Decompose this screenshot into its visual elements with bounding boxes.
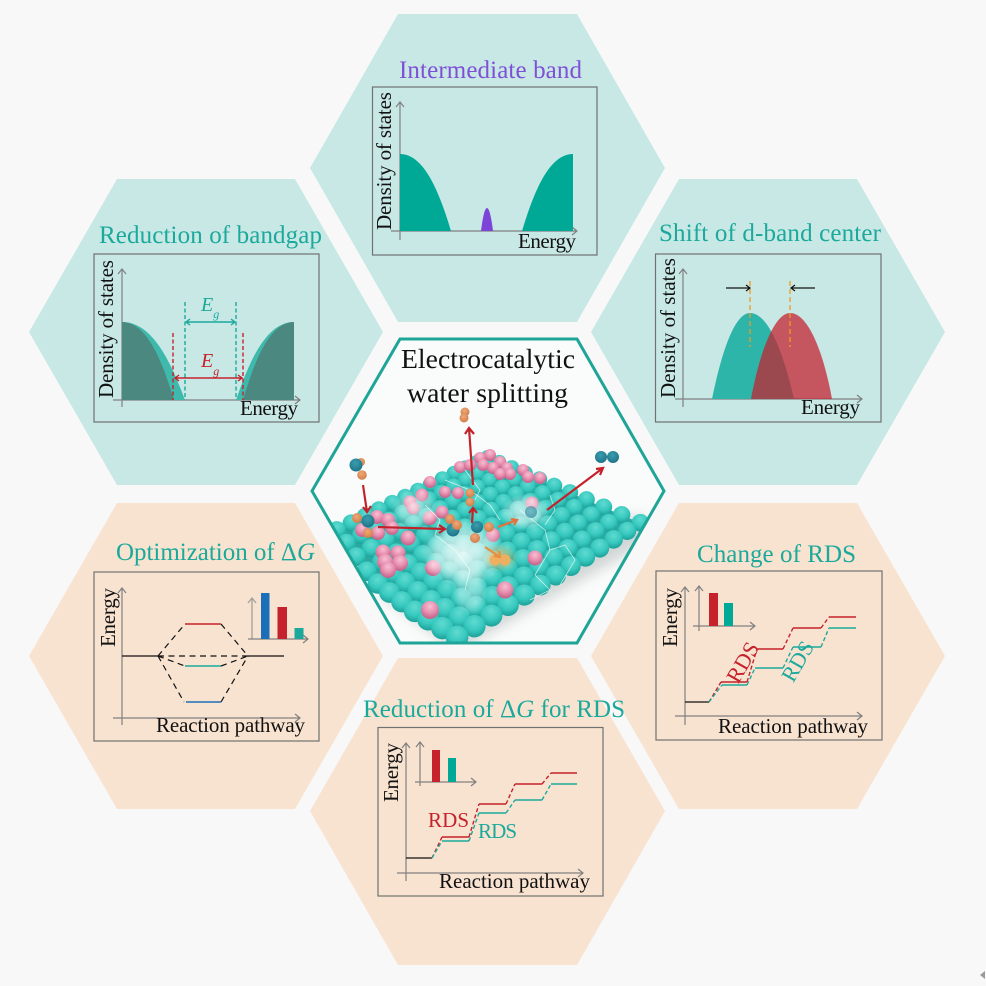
lightning lines [425, 470, 575, 600]
chart: energy levels: Energy [96, 588, 120, 647]
heading: change of RDS: Change of RDS [697, 541, 856, 568]
chart: bandgap comparison [94, 254, 319, 422]
corner mark [980, 971, 985, 979]
chart: change of rate determining step: Energy [658, 588, 682, 647]
chart: change of rate determining step: RDS [776, 636, 819, 686]
panel: reduction of delta G for RDS [310, 658, 665, 965]
chart: d-band shift: Density of states [656, 258, 680, 398]
hexagon outline [312, 339, 664, 643]
reaction arrows [363, 428, 603, 557]
panel: central electrocatalytic water splitting [312, 339, 664, 653]
chart: d-band shift [656, 254, 881, 422]
chart: bandgap comparison: Energy [240, 396, 298, 420]
water and gas molecules [350, 408, 619, 566]
catalyst illustration [332, 449, 648, 642]
chart: density of states with intermediate band: Density of states [372, 92, 396, 230]
chart: reduced barrier of rate determining step: RDS [478, 819, 517, 843]
chart: energy levels: Reaction pathway [156, 713, 306, 737]
heading: optimization of delta G: Optimization of ΔG [116, 539, 315, 566]
chart: bandgap comparison: E [201, 350, 213, 372]
chart: change of rate determining step [656, 571, 882, 740]
heading: shift of d-band center: Shift of d-band center [659, 220, 882, 247]
panel: central electrocatalytic water splitting: water splitting [407, 377, 568, 408]
chart: change of rate determining step: Reaction pathway [718, 714, 868, 738]
chart: energy levels [94, 572, 319, 741]
panel: shift of d-band center [591, 179, 945, 485]
panel: change of RDS [591, 503, 945, 809]
heading: central title: Electrocatalytic [401, 343, 575, 374]
chart: reduced barrier of rate determining step: Reaction pathway [439, 869, 590, 893]
chart: reduced barrier of rate determining step [378, 728, 603, 896]
chart: bandgap comparison: g [213, 307, 219, 321]
inset bar chart [248, 593, 308, 643]
panel: intermediate band [310, 14, 665, 322]
inset bar chart [415, 742, 476, 786]
chart: density of states with intermediate band [372, 87, 597, 255]
chart: bandgap comparison: g [213, 364, 219, 378]
inset bar chart [693, 586, 755, 631]
reaction glow [391, 490, 549, 616]
chart: change of rate determining step: RDS [721, 637, 764, 687]
heading: reduction of bandgap: Reduction of bandgap [99, 222, 322, 249]
heading: intermediate band: Intermediate band [399, 57, 582, 84]
chart: reduced barrier of rate determining step: RDS [428, 808, 469, 832]
chart: density of states with intermediate band: Energy [518, 229, 576, 253]
chart: bandgap comparison: E [201, 294, 213, 316]
pink dopant atoms [355, 449, 546, 619]
panel: optimization of delta G [29, 503, 383, 809]
chart: d-band shift: Energy [801, 395, 860, 419]
chart: bandgap comparison: Density of states [94, 260, 118, 398]
heading: reduction of delta G for RDS: Reduction of ΔG for RDS [363, 696, 625, 723]
chart: reduced barrier of rate determining step: Energy [379, 742, 403, 802]
panel: reduction of bandgap [29, 179, 383, 485]
